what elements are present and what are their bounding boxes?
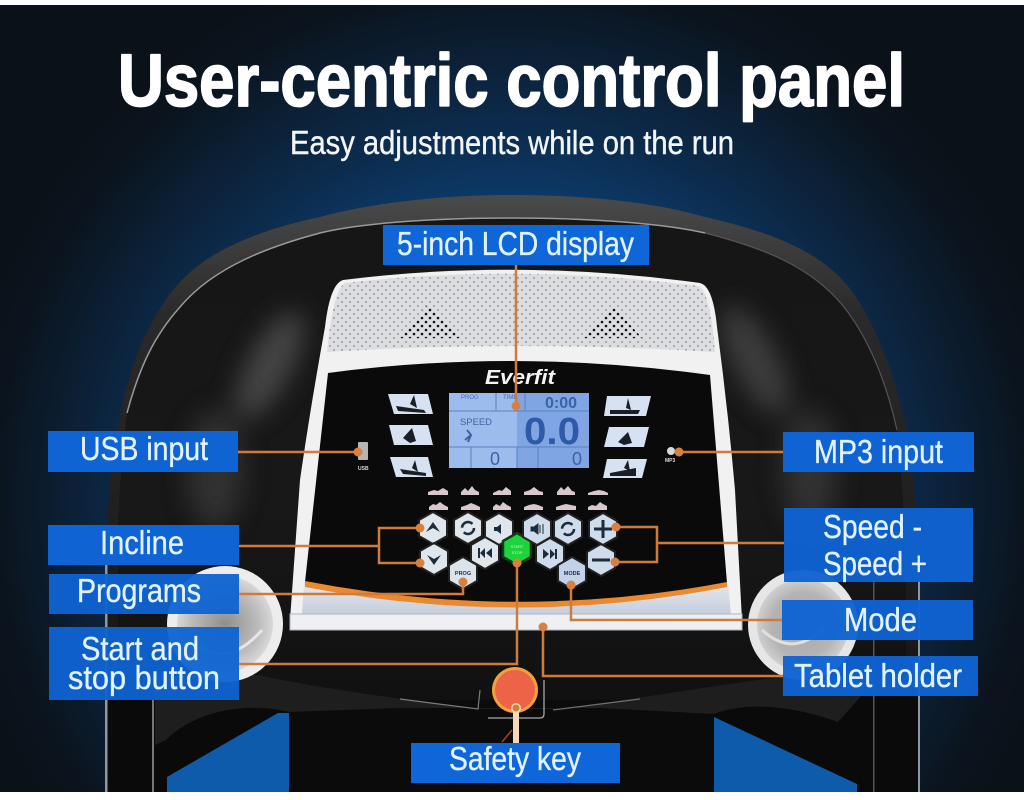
safety key wire xyxy=(502,730,512,742)
label: USB input: USB input xyxy=(80,430,208,467)
white panel frame xyxy=(290,270,742,630)
control panel xyxy=(290,270,742,630)
label: Incline xyxy=(48,524,239,565)
left program icons xyxy=(388,394,433,477)
LCD display: 0.0 xyxy=(524,411,580,453)
right frame leg xyxy=(714,580,920,792)
label: Start and stop button: stop button xyxy=(68,659,220,696)
connector: incline xyxy=(239,524,424,568)
tablet holder tray xyxy=(302,582,731,614)
left handle knob xyxy=(167,566,283,682)
MP3 port xyxy=(665,447,676,464)
LCD display: 0 xyxy=(490,449,500,469)
LCD display xyxy=(449,393,589,469)
treadmill console xyxy=(105,195,920,792)
left speaker dots xyxy=(398,305,460,338)
mode button xyxy=(558,557,586,589)
program mini charts xyxy=(428,486,608,510)
label: USB input xyxy=(48,430,238,472)
label: Start and stop button: Start and xyxy=(81,630,199,667)
volume up button xyxy=(523,513,551,545)
right rim highlight xyxy=(705,233,897,430)
label: Safety key: Safety key xyxy=(449,740,581,777)
lower shell band xyxy=(155,673,872,745)
LCD display: 0 xyxy=(572,449,582,469)
black fascia xyxy=(305,361,727,602)
LCD display: 0:00 xyxy=(545,395,577,412)
label: Programs: Programs xyxy=(77,572,201,609)
connector: speed xyxy=(610,522,784,566)
mode button: MODE xyxy=(564,571,581,577)
repeat button right xyxy=(554,513,582,545)
incline down button xyxy=(420,543,448,575)
shell seam left xyxy=(400,690,480,709)
right program icons xyxy=(603,396,651,478)
label: MP3 input: MP3 input xyxy=(814,433,943,470)
right handle knob xyxy=(748,570,858,680)
orange accent stripe xyxy=(305,581,727,608)
program button xyxy=(449,557,477,589)
label: Safety key xyxy=(411,740,620,783)
label: Mode xyxy=(782,600,973,640)
label: Speed xyxy=(784,508,973,582)
program button: PROG xyxy=(455,571,471,577)
previous track button xyxy=(471,537,499,569)
safety key recess xyxy=(488,680,544,718)
speed minus button xyxy=(587,544,615,576)
label: Programs xyxy=(49,572,239,614)
brand logo: Everfit xyxy=(485,367,557,389)
connector: USB input xyxy=(238,448,362,456)
LCD display: SPEED xyxy=(460,417,493,427)
connector: programs xyxy=(239,578,468,594)
label: Mode: Mode xyxy=(844,601,917,638)
subtitle: Easy adjustments while on the run xyxy=(290,124,734,161)
tablet holder lip xyxy=(290,614,742,630)
label: Speed: Speed + xyxy=(823,545,927,582)
USB port: USB xyxy=(358,466,369,472)
right blue gap xyxy=(714,717,857,792)
connector: LCD display xyxy=(512,265,520,410)
USB port xyxy=(358,442,369,472)
centre column xyxy=(290,700,714,792)
console outer shell xyxy=(107,195,918,792)
title: User-centric control panel xyxy=(118,39,905,122)
volume down button xyxy=(485,513,513,545)
left blue gap xyxy=(167,713,289,792)
speed plus button xyxy=(589,513,617,545)
connector: MP3 input xyxy=(674,448,783,456)
label: 5-inch LCD display: 5-inch LCD display xyxy=(397,225,634,262)
label: Tablet holder: Tablet holder xyxy=(794,657,962,694)
right speaker dots xyxy=(583,306,642,338)
speaker grille xyxy=(327,274,715,352)
label: Speed: Speed - xyxy=(823,508,922,545)
label: Incline: Incline xyxy=(100,524,184,561)
MP3 port: MP3 xyxy=(665,458,676,464)
rim highlight xyxy=(127,218,705,413)
incline up button xyxy=(419,512,447,544)
control buttons xyxy=(419,512,617,589)
safety key button xyxy=(492,667,538,744)
LCD display: PROG xyxy=(461,395,479,401)
left frame leg xyxy=(105,560,290,792)
repeat button left xyxy=(454,512,482,544)
start stop button: START xyxy=(511,544,524,549)
next track button xyxy=(536,538,564,570)
start stop button xyxy=(503,533,531,565)
label: Start and stop button xyxy=(49,627,239,700)
connector: tablet holder xyxy=(538,622,783,676)
shell sheen xyxy=(187,297,838,530)
connector: mode xyxy=(566,580,782,620)
connector: start and stop xyxy=(239,558,522,664)
LCD display: TIME xyxy=(503,395,517,401)
connector lines xyxy=(238,265,784,676)
console inner surface xyxy=(118,218,906,792)
shell seam right xyxy=(553,699,640,710)
start stop button: STOP xyxy=(512,550,523,555)
